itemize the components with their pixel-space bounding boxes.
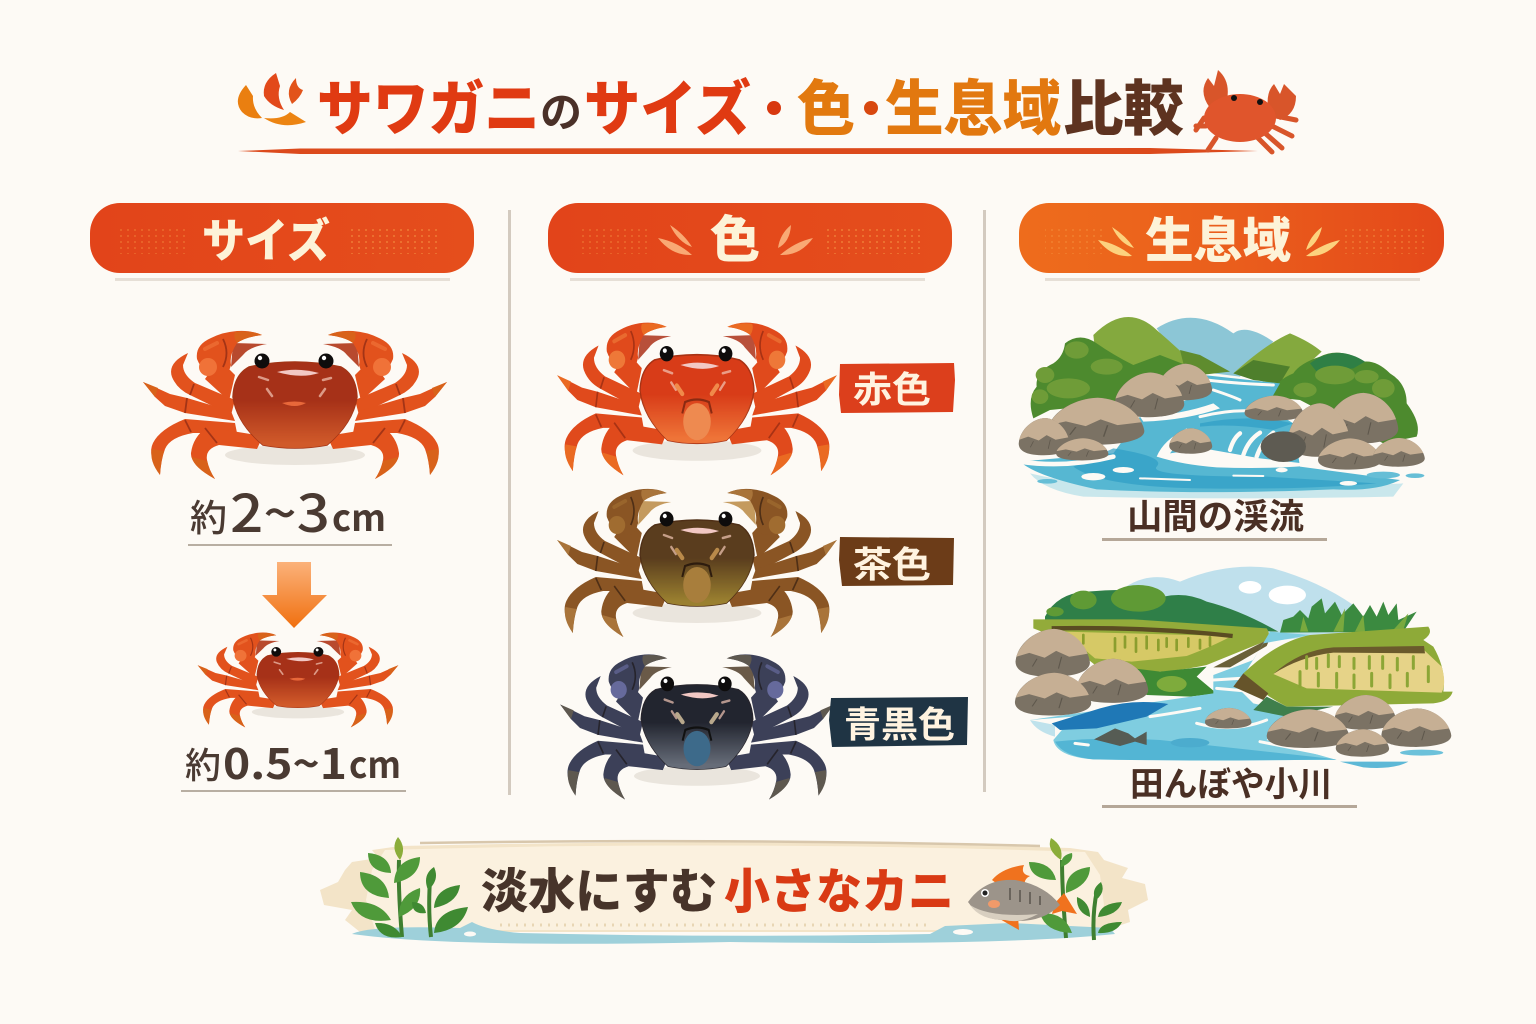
colour tag: brown: 茶色	[853, 536, 931, 588]
size label: juvenile: cm	[349, 735, 401, 789]
colour tag: red	[839, 361, 955, 413]
colour tag: blue-black: 青黒色	[844, 696, 955, 748]
heading: habitat: 生息域	[1145, 201, 1291, 271]
infographic canvas	[90, 70, 1453, 944]
size label: adult: cm	[332, 488, 386, 542]
banner water	[352, 922, 1115, 944]
title text segments: サワガニ	[317, 61, 540, 148]
heading: size: サイズ	[202, 205, 330, 271]
title: 比較	[1063, 61, 1184, 148]
size label: adult: 約	[190, 488, 227, 542]
icon: fish	[968, 865, 1077, 930]
size label: juvenile: 0.5~1	[223, 731, 347, 792]
colour tag: brown	[839, 536, 954, 588]
icon: water plants right	[1029, 838, 1122, 940]
illustration: red crab	[557, 323, 837, 475]
banner text: 淡水にすむ	[481, 852, 717, 922]
banner: freshwater	[320, 837, 1148, 944]
size label: adult	[188, 472, 392, 547]
icon: water plants left	[351, 837, 468, 937]
size label: juvenile	[181, 731, 406, 792]
banner parchment	[320, 842, 1148, 932]
illustration: paddy and brook	[1015, 567, 1453, 768]
label: mountain stream: 山間の渓流	[1127, 489, 1304, 540]
panel: size	[90, 203, 474, 792]
panel: habitat	[1015, 201, 1453, 808]
icon: flame swirl	[238, 73, 306, 125]
label: paddy and brook: 田んぼや小川	[1130, 757, 1332, 806]
heading: colour: 色	[710, 200, 760, 272]
arrow: down	[262, 562, 327, 628]
illustration: blue-black crab	[560, 654, 834, 800]
heading: habitat	[1019, 201, 1444, 281]
title: 生息域	[885, 61, 1061, 148]
size label: adult: 2~3	[230, 472, 330, 547]
title	[238, 61, 1296, 154]
dividers	[508, 210, 986, 795]
icon: title crab	[1196, 70, 1296, 152]
size label: juvenile: 約	[185, 737, 221, 789]
title: サイズ	[584, 61, 751, 148]
heading: colour	[548, 200, 952, 281]
illustration: small red crab	[198, 633, 398, 727]
panel: colour	[548, 200, 968, 800]
banner: freshwater: 小さなカニ	[724, 852, 954, 922]
title underline	[238, 148, 1258, 154]
illustration: large red crab	[143, 331, 447, 479]
colour tag: red: 赤色	[853, 361, 931, 413]
heading: size	[90, 203, 474, 281]
title: 色	[797, 61, 855, 148]
illustration: mountain stream	[1019, 317, 1425, 498]
title: の	[540, 79, 582, 140]
illustration: brown crab	[557, 489, 837, 637]
